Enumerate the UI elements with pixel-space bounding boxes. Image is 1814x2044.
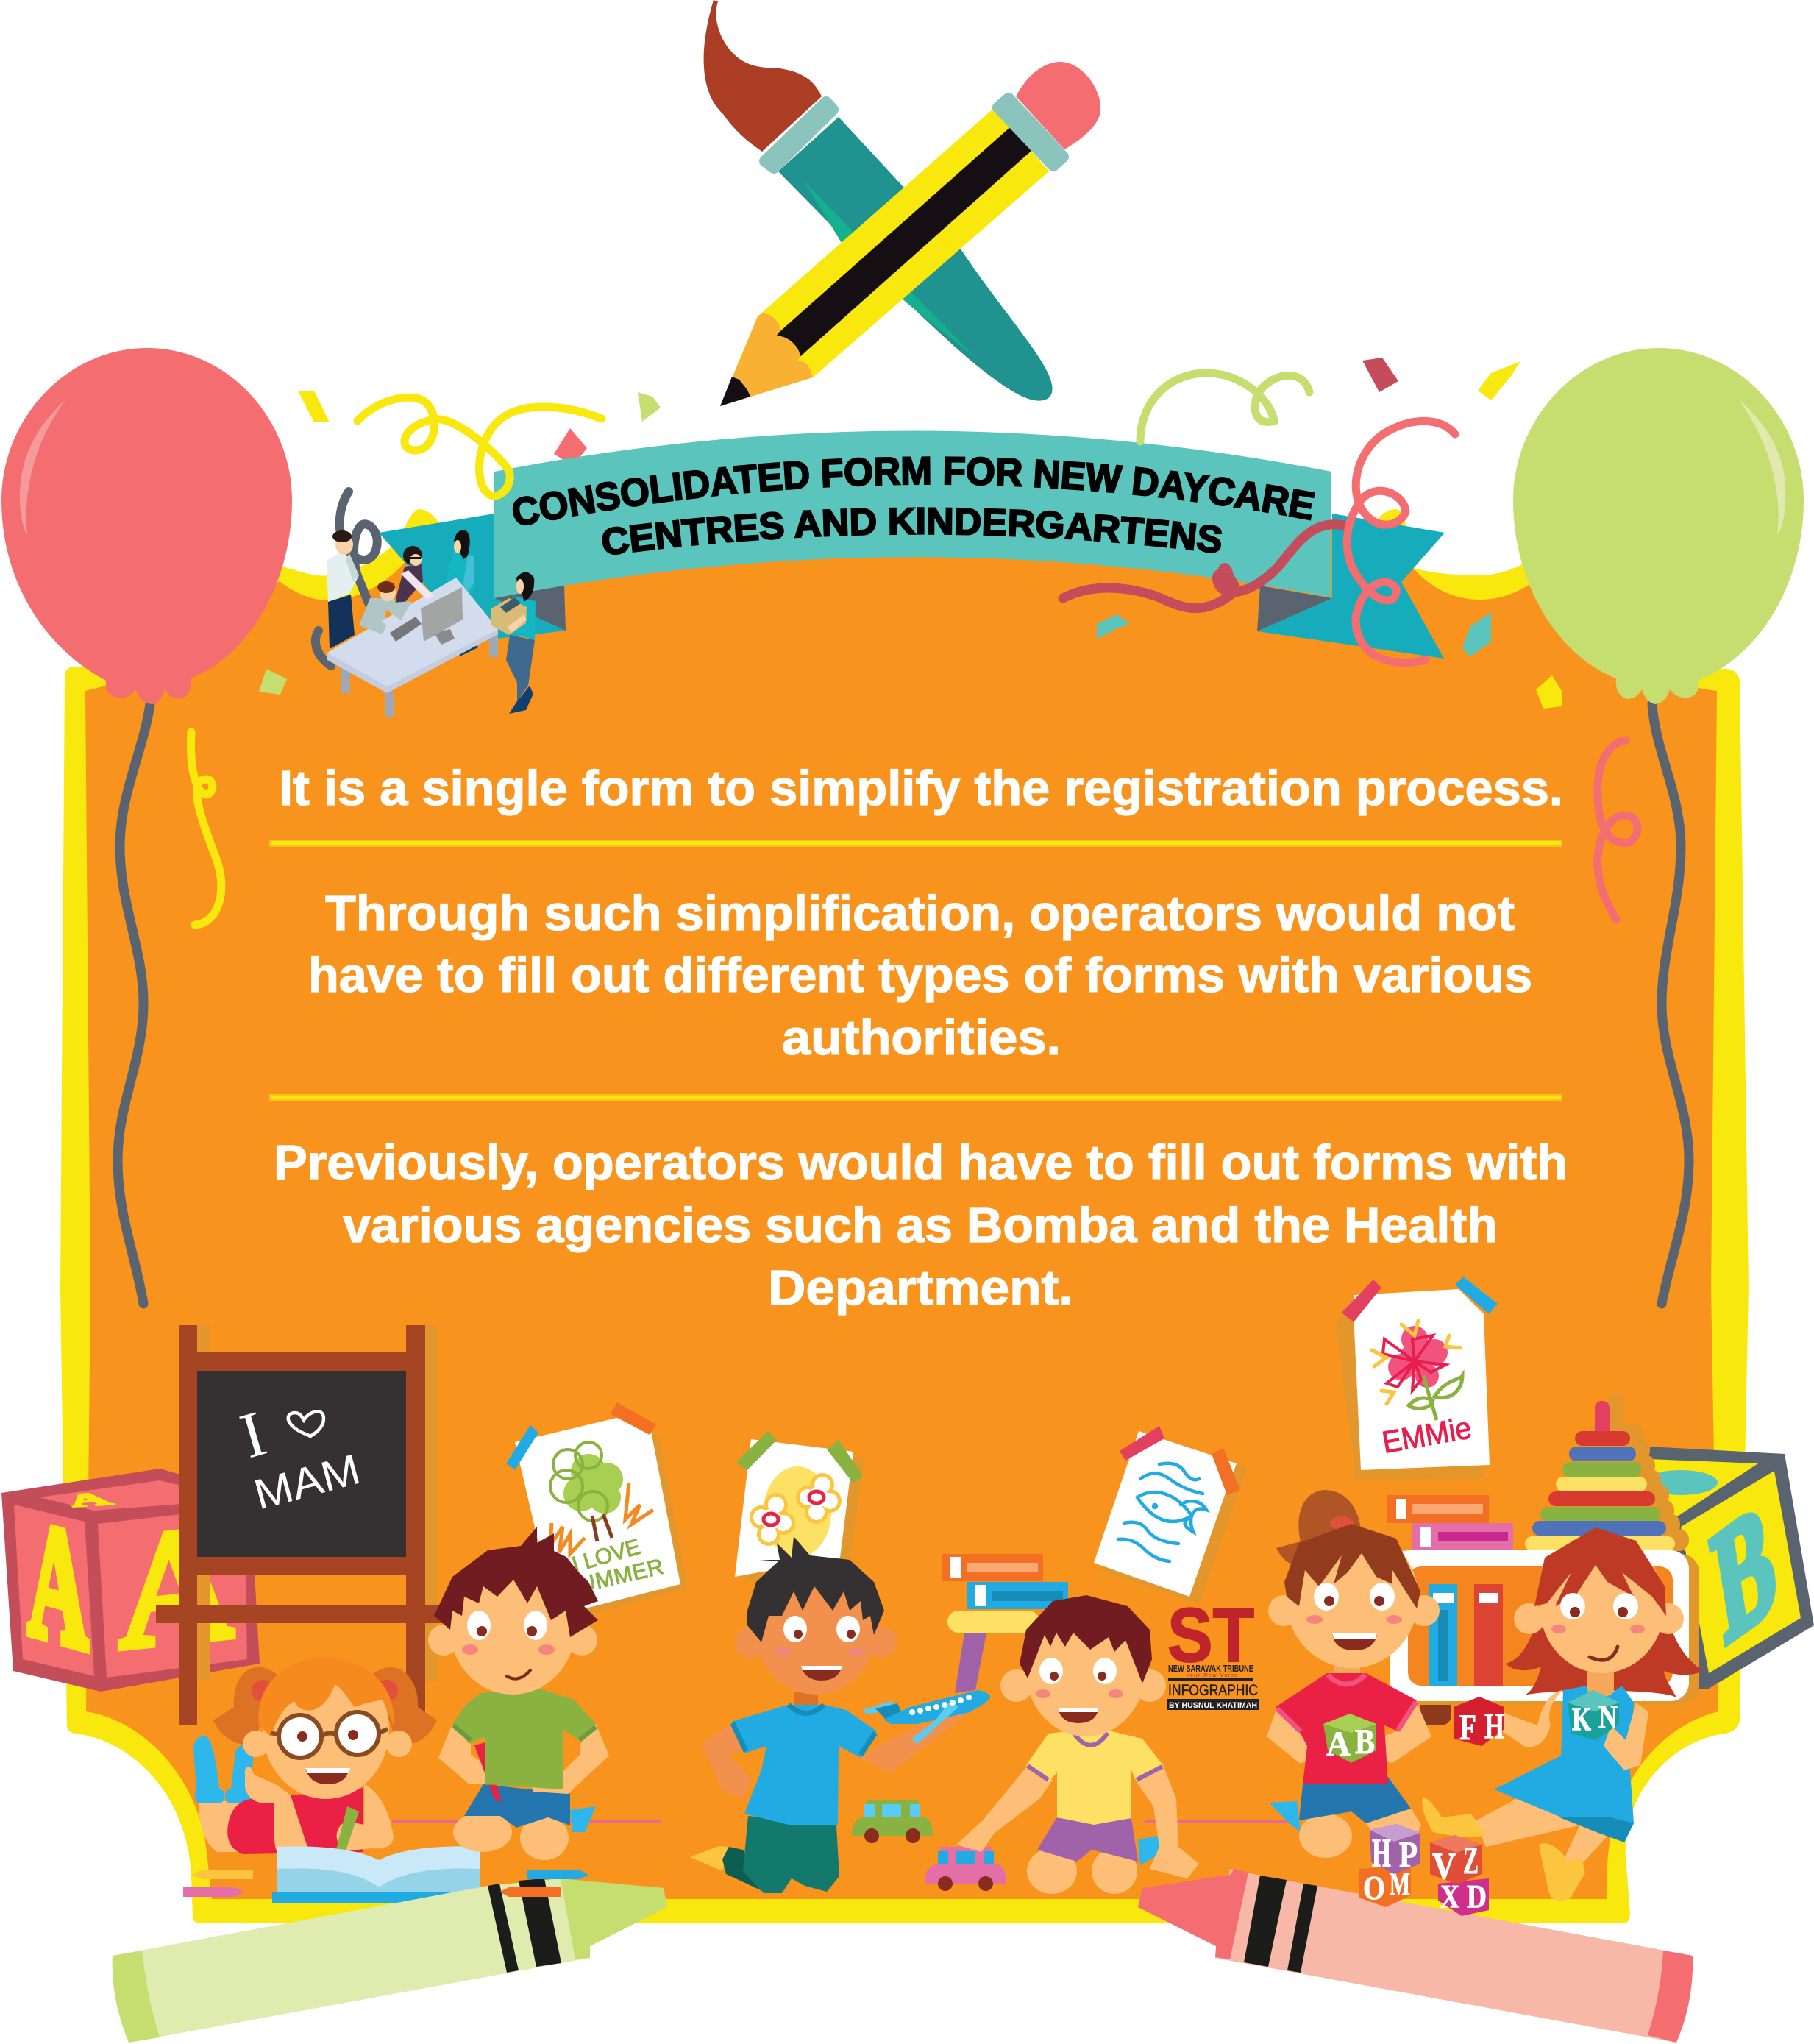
text: third paragraph: Previously, operators would have to fill out forms with (274, 1135, 1568, 1190)
OM cube (1359, 1865, 1411, 1907)
divider two (270, 1095, 1562, 1100)
seated man body (359, 581, 397, 634)
feet and legs (1422, 1797, 1611, 1901)
child: boy in yellow shirt (956, 1595, 1199, 1894)
ST logo: ST (1167, 1593, 1254, 1678)
left green crayon (113, 1878, 667, 2043)
bookshelf (1390, 1550, 1699, 1725)
child: girl in red shirt (1267, 1490, 1440, 1858)
floor line (392, 1820, 1295, 1823)
pencil wood tip (720, 313, 813, 406)
text: second paragraph: Through such simplification, operators would not (325, 886, 1515, 941)
brush handle (778, 117, 1053, 401)
OM cube: M (1390, 1866, 1410, 1902)
caption: I LOVE (569, 1535, 643, 1578)
ears and face (1514, 1603, 1545, 1634)
desk (327, 578, 498, 717)
ST logo: Your New Voice (1186, 1673, 1237, 1678)
eyes (467, 1611, 491, 1640)
standing man (327, 530, 359, 649)
block letters: A (28, 1484, 88, 1685)
FH cube (1454, 1697, 1504, 1747)
alphabet block B (1611, 1447, 1814, 1689)
arms (1267, 1710, 1327, 1763)
AB cube: A (1326, 1725, 1351, 1764)
left tail (379, 514, 566, 647)
grey streamer (316, 492, 377, 666)
chalkboard easel (156, 1325, 446, 1725)
ears and face (1000, 1669, 1033, 1702)
mouth (801, 1666, 842, 1681)
FH cube: F (1459, 1706, 1476, 1747)
child: red-haired girl in blue dress (1422, 1527, 1703, 1901)
ears and face (1268, 1595, 1299, 1626)
small table with books (942, 1554, 1068, 1693)
ears and face (735, 1627, 766, 1658)
small letter cubes (1359, 1824, 1489, 1916)
paper: tree drawing: SUMMER (562, 1555, 666, 1601)
neck (1334, 1663, 1360, 1685)
arms and pencil (245, 1767, 307, 1864)
right tail (1257, 514, 1445, 659)
dress (1494, 1686, 1634, 1842)
VZ cube: Z (1463, 1840, 1479, 1882)
arms (1493, 1690, 1563, 1747)
title text: CONSOLIDATED FORM FOR NEW DAYCARE (512, 456, 1315, 525)
ponytail (1276, 1490, 1362, 1566)
AB cube (1323, 1714, 1376, 1764)
legs (1027, 1848, 1077, 1894)
pencil body (758, 108, 1049, 377)
brush ferrule (765, 102, 833, 168)
sock (1269, 1801, 1301, 1832)
balloon: green (1513, 348, 1804, 704)
text: third paragraph (274, 1135, 1568, 1316)
arms (438, 1724, 497, 1784)
VZ cube (1430, 1835, 1482, 1887)
hair back (1506, 1604, 1703, 1697)
mouth (1058, 1708, 1099, 1723)
signature: EMMie (1379, 1410, 1474, 1460)
keyboard and monitor (390, 587, 463, 645)
balloon: red (1, 348, 292, 704)
stacking ring toy (1525, 1394, 1689, 1551)
neck (1075, 1722, 1106, 1744)
AB cube: B (1355, 1722, 1375, 1761)
pigtails (213, 1667, 437, 1745)
smile (507, 1670, 530, 1679)
panel: orange board (85, 530, 1718, 1899)
brush bristles (704, 0, 822, 152)
open book (272, 1846, 485, 1903)
KN cube: N (1598, 1699, 1618, 1735)
shirt (1026, 1731, 1163, 1825)
paintbrush (704, 0, 1053, 401)
left foot (690, 1846, 728, 1871)
arms (702, 1724, 752, 1799)
tree doodle (550, 1442, 653, 1554)
small crayons (183, 1870, 588, 1897)
shorts (464, 1784, 570, 1828)
people around desk (316, 492, 536, 717)
eyes (1314, 1583, 1339, 1611)
ears and face (428, 1625, 459, 1656)
shirt (1276, 1673, 1417, 1784)
eyes (1039, 1658, 1063, 1684)
sock (1138, 1836, 1159, 1865)
trousers (743, 1816, 839, 1893)
hair (747, 1536, 884, 1642)
crayon (474, 1742, 502, 1803)
shorts (1037, 1818, 1138, 1862)
ribbon tails (379, 514, 1445, 659)
raised legs and socks (199, 1801, 254, 1852)
KN cube: K (1572, 1701, 1591, 1737)
flower petals (750, 1473, 842, 1546)
toy airplane (863, 1690, 990, 1744)
text: second paragraph: authorities. (782, 1010, 1061, 1065)
woman carrying box (491, 572, 536, 714)
flower doodle (1372, 1321, 1462, 1420)
chalk writing: MAM (249, 1445, 365, 1519)
title banner: CENTRES AND KINDERGARTENS (602, 507, 1223, 555)
shirt (452, 1688, 596, 1789)
child: boy in blue shirt (690, 1536, 990, 1893)
toy car: pink (925, 1847, 1006, 1891)
chalk writing (233, 1398, 365, 1519)
XD cube: D (1467, 1878, 1487, 1915)
ST logo: NEW SARAWAK TRIBUNE (1168, 1663, 1253, 1674)
paper: tree drawing (506, 1402, 688, 1617)
mouth (1332, 1634, 1377, 1650)
XD cube (1438, 1878, 1489, 1916)
VZ cube: V (1432, 1845, 1456, 1887)
glasses and eyes (279, 1715, 321, 1758)
text: third paragraph: various agencies such as Bomba and the Health (343, 1198, 1498, 1253)
hair (434, 1527, 598, 1637)
KN cube (1568, 1690, 1619, 1740)
streamer: yellow squiggle left of text (191, 732, 221, 925)
block letter: B (1703, 1467, 1785, 1678)
standing woman behind desk (445, 530, 478, 656)
head (243, 1731, 269, 1757)
mouth (305, 1769, 349, 1784)
chalk writing: I (233, 1398, 274, 1472)
eyes (783, 1616, 807, 1642)
text: line one: It is a single form to simplify the registration process. (279, 761, 1563, 816)
streamer: coral squiggle right of text (1598, 740, 1637, 920)
fish doodle (1118, 1463, 1206, 1561)
woman in vest body (395, 546, 423, 608)
hair (1284, 1524, 1420, 1608)
child: boy in green shirt (428, 1527, 609, 1860)
alphabet block A: A (60, 1488, 117, 1511)
panel: yellow scalloped frame (60, 509, 1749, 1923)
shorts (1299, 1777, 1411, 1823)
HP cube (1370, 1824, 1420, 1876)
ST logo (1167, 1593, 1259, 1710)
smile (1590, 1647, 1618, 1660)
pencil (720, 62, 1100, 406)
eyes (1560, 1593, 1585, 1619)
arms resting on desk (359, 570, 434, 634)
arms (956, 1767, 1053, 1852)
pencil eraser (1016, 62, 1100, 149)
HP cube: P (1399, 1834, 1418, 1875)
paper: Emmie flower drawing (1336, 1277, 1498, 1480)
neck (1587, 1667, 1614, 1696)
child: girl with glasses lying down (193, 1658, 437, 1864)
HP cube: H (1372, 1831, 1391, 1876)
paper: flower drawing (735, 1431, 864, 1582)
divider one (270, 840, 1562, 846)
ST logo: INFOGRAPHIC (1168, 1682, 1258, 1699)
balloon strings (118, 704, 1689, 1304)
ST logo: BY HUSNUL KHATIMAH (1169, 1701, 1257, 1710)
XD cube: X (1440, 1878, 1459, 1915)
hair (1020, 1595, 1152, 1683)
book stack on shelf (1387, 1495, 1513, 1550)
alphabet block A: A (119, 1488, 234, 1684)
hair front (1534, 1527, 1666, 1616)
body text block (270, 761, 1568, 1316)
torso (227, 1788, 363, 1854)
confetti pieces (259, 358, 1562, 709)
FH cube: H (1484, 1705, 1504, 1746)
text: second paragraph (308, 886, 1532, 1065)
pencil ferrule (998, 99, 1063, 166)
streamers over banner (358, 373, 1455, 662)
OM cube: O (1363, 1869, 1385, 1906)
text: third paragraph: Department. (768, 1260, 1073, 1316)
text: second paragraph: have to fill out different types of forms with various (308, 948, 1532, 1003)
socks (570, 1806, 596, 1832)
shirt (731, 1705, 877, 1825)
neck (794, 1692, 818, 1714)
right coral crayon (1138, 1869, 1693, 2043)
paper: fish drawing (1094, 1426, 1247, 1604)
alphabet block A (1, 1469, 260, 1692)
legs (1299, 1814, 1352, 1858)
title banner (494, 431, 1331, 598)
legs (453, 1812, 512, 1852)
toy car: green (852, 1800, 933, 1843)
